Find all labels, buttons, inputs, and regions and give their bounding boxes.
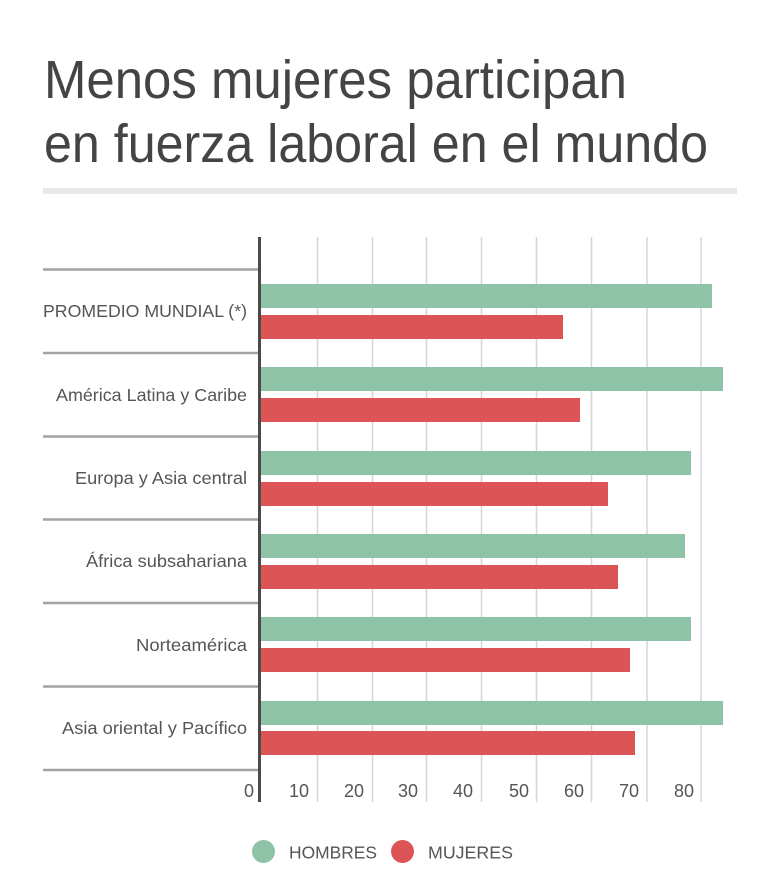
- row: América Latina y Caribe: [56, 367, 723, 422]
- axis tick labels: [244, 781, 694, 801]
- axis tick labels: 40: [453, 781, 473, 801]
- axis tick labels: 60: [564, 781, 584, 801]
- legend: mujeres: [391, 840, 513, 863]
- vertical axis: [258, 237, 261, 802]
- axis tick labels: 10: [289, 781, 309, 801]
- legend: [252, 840, 513, 863]
- row: Europa y Asia central: Europa y Asia central: [75, 468, 247, 488]
- row: Asia oriental y Pacífico: Asia oriental y Pacífico: [62, 718, 247, 738]
- axis tick labels: 80: [674, 781, 694, 801]
- row: América Latina y Caribe: América Latina y Caribe: [56, 385, 247, 405]
- row: Promedio mundial: PROMEDIO MUNDIAL (*): [43, 301, 247, 321]
- axis tick labels: 0: [244, 781, 254, 801]
- legend: mujeres: MUJERES: [428, 842, 513, 862]
- axis tick labels: 50: [509, 781, 529, 801]
- row: Norteamérica: Norteamérica: [136, 635, 247, 655]
- row: Asia oriental y Pacífico: [62, 701, 723, 755]
- axis tick labels: 20: [344, 781, 364, 801]
- legend: hombres: HOMBRES: [289, 842, 377, 862]
- title: en fuerza laboral en el mundo: [44, 114, 708, 174]
- bar chart: [43, 284, 723, 755]
- row: África subsahariana: África subsahariana: [86, 551, 247, 571]
- title: [44, 50, 708, 174]
- title: Menos mujeres participan: [44, 50, 627, 110]
- row: Promedio mundial: [43, 284, 712, 339]
- axis tick labels: 70: [619, 781, 639, 801]
- row: Europa y Asia central: [75, 451, 691, 506]
- axis tick labels: 30: [398, 781, 418, 801]
- row: África subsahariana: [86, 534, 685, 589]
- row: Norteamérica: [136, 617, 691, 672]
- legend: hombres: [252, 840, 377, 863]
